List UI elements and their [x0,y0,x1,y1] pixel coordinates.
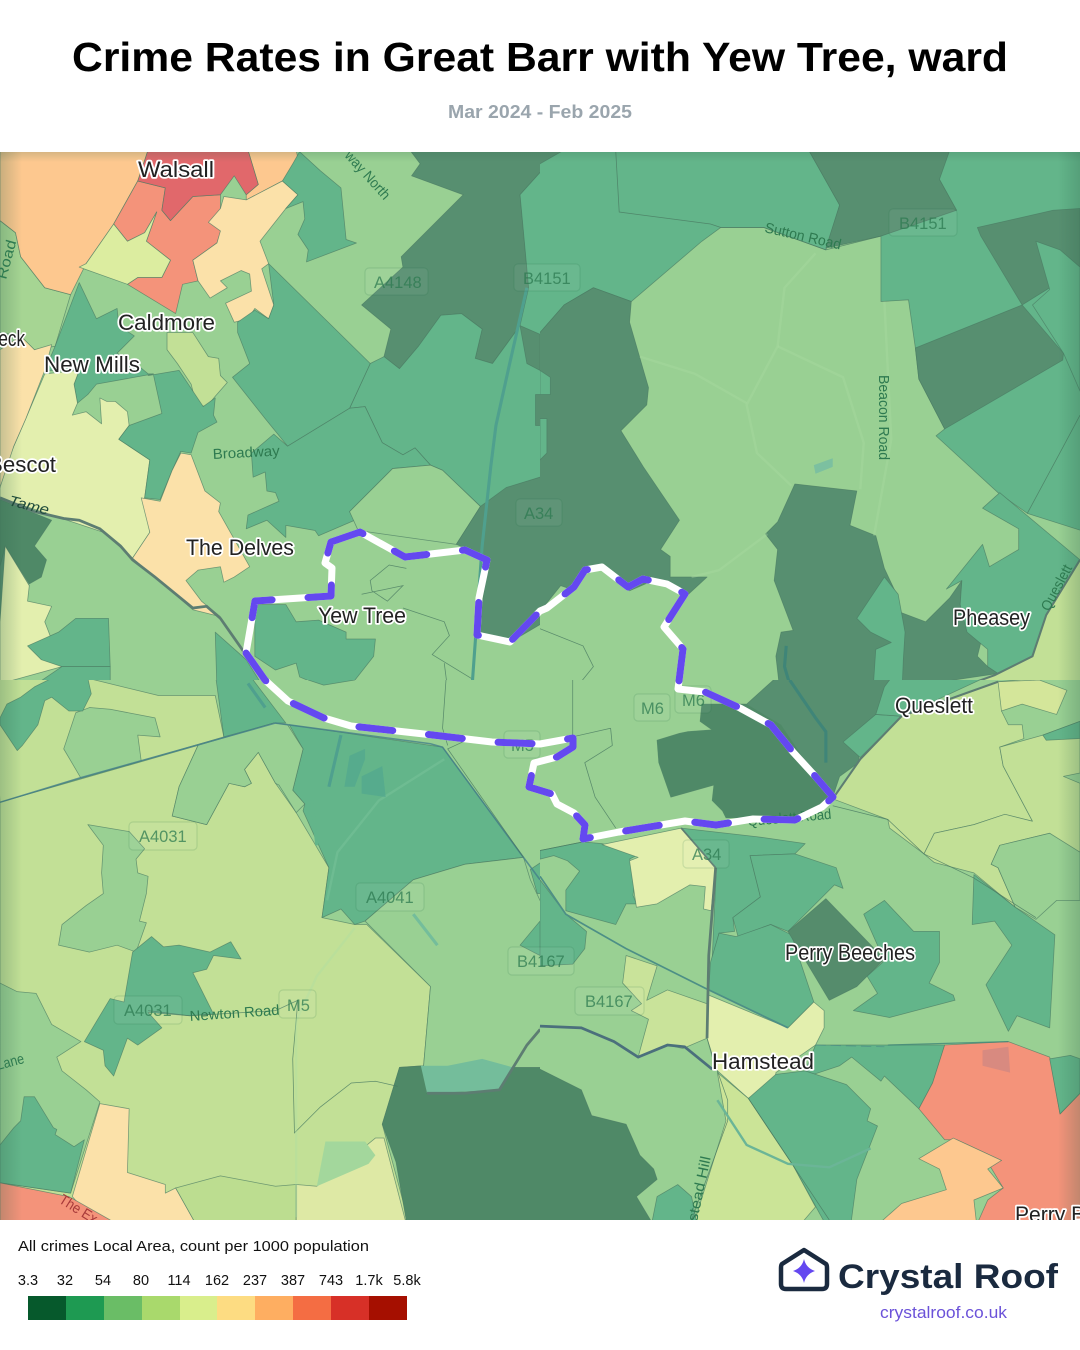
place labels: Caldmore [118,310,215,335]
road shields [114,209,957,1024]
legend title: All crimes Local Area, count per 1000 population [18,1239,369,1255]
legend colour ramp [28,1296,407,1320]
road names: Tame [7,493,51,519]
logo url: crystalroof.co.uk [880,1304,1008,1322]
road shields: M5 [287,997,310,1015]
ward boundary: Great Barr with Yew Tree [246,532,833,839]
place labels: Perry Beeches [785,940,915,965]
road names: The Ex [56,1192,101,1228]
road shields: A4148 [374,274,422,292]
road names: Queslett Road [747,807,832,830]
place labels: New Mills [44,352,140,377]
legend scale values: 114 [167,1273,191,1289]
map area: south-west [0,673,568,1231]
road names: way North [340,147,393,203]
road shields: B4167 [585,993,633,1011]
legend scale values: 80 [133,1273,149,1289]
road names [0,147,1076,1228]
subtitle: date range: Mar 2024 - Feb 2025 [448,102,632,122]
title: Crime Rates in Great Barr with Yew Tree, ward [72,34,1008,80]
road shields: A4031 [124,1002,172,1020]
place labels [0,157,1080,1227]
road shields: A4041 [366,889,414,907]
place labels: Pheasey [953,605,1030,630]
legend scale values: 387 [281,1273,305,1289]
place labels: Yew Tree [318,603,406,628]
road shields: A34 [692,846,721,864]
place labels: Hamstead [712,1049,814,1074]
map area: south-east [506,673,1080,1231]
place labels: The Delves [186,535,294,560]
road names: Newton Road [189,1003,280,1025]
map area: north-west [0,150,585,690]
legend scale values: 1.7k [355,1273,383,1289]
logo icon: house with star [781,1250,827,1289]
place labels: Queslett [895,693,973,718]
road shields: M6 [641,700,664,718]
road shields: B4151 [899,215,947,233]
place labels: Walsall [138,157,214,182]
legend scale values: 32 [57,1273,73,1289]
vignette [0,152,1080,1220]
legend scale values: 3.3 [18,1273,38,1289]
road shields: M5 [511,737,534,755]
road names: stead Hill [685,1155,715,1223]
road names: Queslett [1038,562,1076,614]
road names: Beacon Road [875,375,891,460]
road shields: B4151 [523,270,571,288]
logo wordmark: Crystal Roof [838,1258,1059,1296]
legend scale values: 5.8k [393,1273,421,1289]
legend scale values [18,1273,421,1289]
road shields: A4031 [139,828,187,846]
legend scale values: 237 [243,1273,267,1289]
map area: north-east [540,152,1080,680]
road names: Sutton Road [763,220,843,253]
legend scale values: 743 [319,1273,343,1289]
road shields: B4167 [517,953,565,971]
road shields: M6 [682,692,705,710]
road names: Broadway [212,443,281,463]
road shields: A34 [524,505,553,523]
legend scale values: 162 [205,1273,229,1289]
legend scale values: 54 [95,1273,111,1289]
